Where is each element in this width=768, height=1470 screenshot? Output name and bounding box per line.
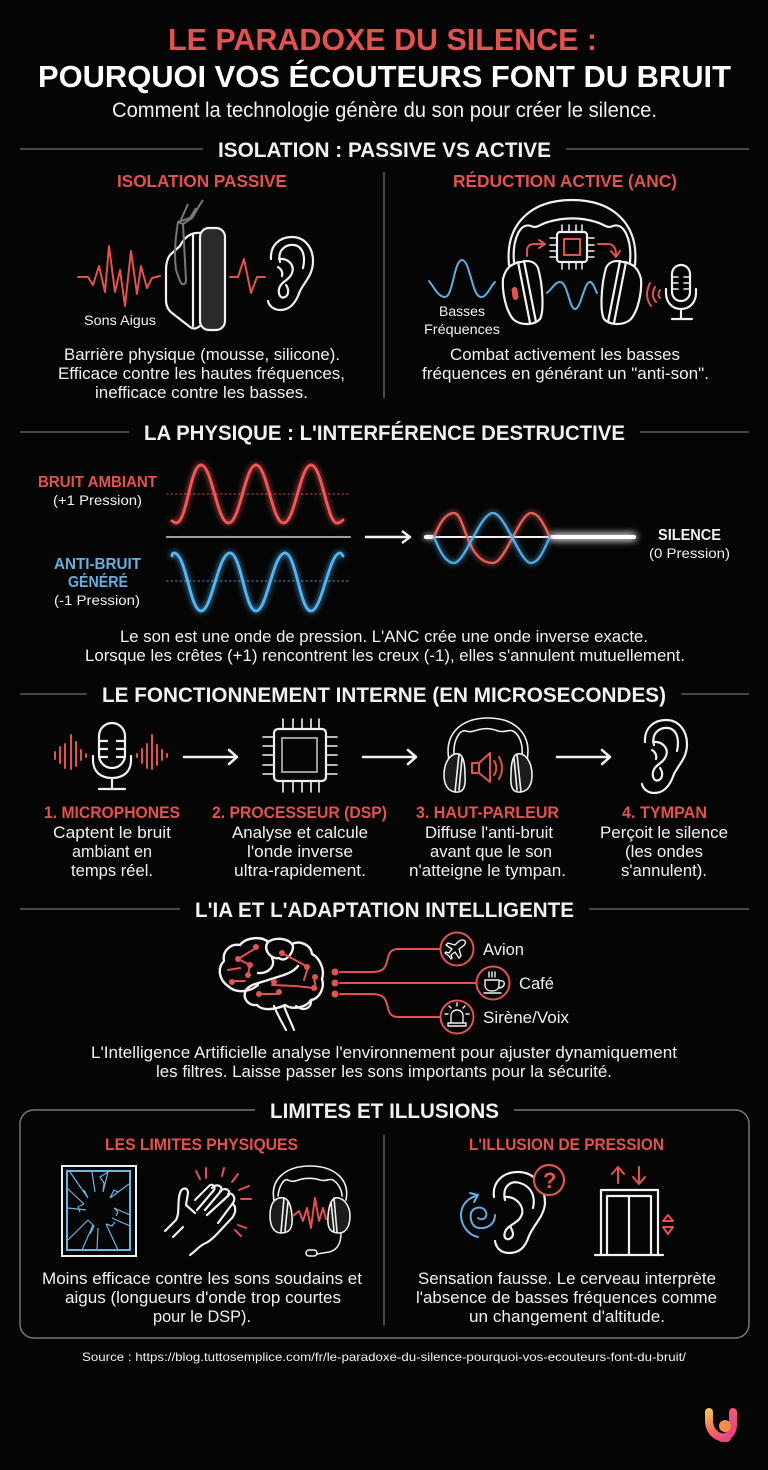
text: passive description: Efficace contre les hautes fréquences, — [58, 365, 345, 383]
label: bruit ambiant: (+1 Pression) — [53, 492, 142, 508]
title: POURQUOI VOS ÉCOUTEURS FONT DU BRUIT — [38, 59, 731, 94]
label: bruit ambiant: BRUIT AMBIANT — [38, 474, 158, 491]
chart: anti-noise wave — [166, 553, 350, 611]
text: n'atteigne le tympan. — [409, 862, 566, 880]
arrows: signal path — [527, 240, 620, 257]
panel: active noise cancelling — [422, 170, 709, 383]
heading: physics: LA PHYSIQUE : L'INTERFÉRENCE DESTRUCTIVE — [144, 420, 625, 445]
text: illusion description: Sensation fausse. Le cerveau interprète — [418, 1270, 716, 1288]
text — [600, 824, 728, 880]
subheading: L'ILLUSION DE PRESSION — [469, 1136, 664, 1154]
title: LE PARADOXE DU SILENCE : — [168, 22, 597, 57]
text: physics description: Le son est une onde de pression. L'ANC crée une onde inverse exacte. — [120, 628, 648, 646]
panel: physical limits — [42, 1136, 362, 1326]
label: silence: SILENCE — [658, 527, 721, 544]
panel: pressure illusion — [416, 1136, 717, 1326]
icon: siren — [440, 1000, 474, 1034]
text: physics description — [85, 628, 685, 665]
subheading: isolation passive: ISOLATION PASSIVE — [117, 171, 287, 191]
text — [232, 824, 368, 880]
frame — [20, 1110, 749, 1338]
text: ambiant en — [72, 843, 152, 861]
chart: resulting silence — [424, 513, 636, 563]
text: limits description: pour le DSP). — [153, 1308, 251, 1326]
arrow — [363, 750, 416, 764]
section: destructive interference — [20, 420, 749, 665]
text: limits description: Moins efficace contre les sons soudains et — [42, 1270, 362, 1288]
label: bruit ambiant — [38, 474, 158, 508]
text: passive description: Barrière physique (mousse, silicone). — [64, 346, 340, 364]
icon: ear with question: ? — [543, 1168, 556, 1193]
label: 2. PROCESSEUR (DSP) — [212, 803, 387, 822]
text: passive description: inefficace contre les basses. — [95, 384, 308, 402]
icon: brain — [220, 938, 323, 1030]
title — [38, 22, 731, 94]
subheading: LES LIMITES PHYSIQUES — [105, 1136, 298, 1154]
label: siren: Sirène/Voix — [483, 1009, 570, 1027]
heading: internal operation: LE FONCTIONNEMENT INTERNE (EN MICROSECONDES) — [102, 683, 666, 707]
icon: spiral — [461, 1193, 495, 1237]
arrow — [557, 750, 610, 764]
connectors — [332, 949, 476, 1017]
text: passive description — [58, 346, 345, 402]
step 4: eardrum — [600, 720, 728, 880]
icon: ear cushion — [166, 200, 225, 330]
text: active description: fréquences en générant un "anti-son". — [422, 365, 709, 383]
source: Source : https://blog.tuttosemplice.com/fr/le-paradoxe-du-silence-pourquoi-vos-ecouteurs-font-du-bruit/ — [82, 1350, 687, 1364]
text: limits description — [42, 1270, 362, 1326]
icon: sound arcs — [647, 283, 660, 306]
text: s'annulent). — [621, 862, 707, 880]
icon: ear with question — [494, 1165, 564, 1253]
icon: microphone — [666, 265, 696, 319]
logo — [709, 1412, 733, 1438]
icon: reduced wave — [230, 259, 265, 293]
label: silence — [649, 527, 730, 561]
text: Perçoit le silence — [600, 824, 728, 842]
chart: ambient noise wave — [166, 465, 350, 523]
panel: isolation passive — [58, 171, 345, 402]
text: ultra-rapidement. — [234, 862, 366, 880]
section: ai adaptation — [20, 898, 749, 1081]
icon: high frequency wave — [78, 246, 160, 306]
icon: coffee — [476, 966, 510, 1000]
section: internal operation — [20, 683, 749, 880]
text: Analyse et calcule — [232, 824, 368, 842]
step 2: processor — [212, 719, 416, 880]
icon: processor — [550, 225, 594, 269]
text: illusion description: un changement d'altitude. — [469, 1308, 665, 1326]
icon: elevator — [595, 1167, 673, 1255]
text: limits description: aigus (longueurs d'onde trop courtes — [65, 1289, 341, 1307]
label: anti-bruit: (-1 Pression) — [54, 592, 140, 608]
icon: anc headphones — [503, 200, 641, 324]
text: ai description: L'Intelligence Artificielle analyse l'environnement pour ajuster dynamiquement — [91, 1044, 677, 1062]
label: anti-bruit — [54, 556, 142, 608]
text — [409, 824, 566, 880]
text: active description: Combat activement les basses — [450, 346, 680, 364]
text: avant que le son — [430, 843, 552, 861]
icon: ear — [268, 237, 313, 310]
text: ai description: les filtres. Laisse passer les sons importants pour la sécurité. — [156, 1063, 612, 1081]
icon: ear — [642, 720, 687, 793]
label: 3. HAUT-PARLEUR — [416, 803, 559, 822]
icon: clapping hands — [165, 1168, 251, 1255]
label: anti-bruit: GÉNÉRÉ — [68, 574, 128, 591]
label: basses frequences — [424, 303, 500, 337]
subheading: anc: RÉDUCTION ACTIVE (ANC) — [453, 170, 677, 191]
text: Captent le bruit — [53, 824, 171, 842]
step 1: microphones — [44, 723, 237, 880]
label: anti-bruit: ANTI-BRUIT — [54, 556, 142, 573]
icon: low frequency wave — [429, 260, 495, 297]
heading: limits: LIMITES ET ILLUSIONS — [270, 1099, 499, 1123]
icon: plane — [440, 932, 474, 966]
text: Diffuse l'anti-bruit — [425, 824, 553, 842]
label: 4. TYMPAN — [622, 803, 707, 822]
arrow: to result — [365, 531, 410, 543]
label: basses frequences: Basses — [439, 303, 485, 319]
text: active description — [422, 346, 709, 383]
label: avion: Avion — [483, 941, 524, 959]
icon: headphones with speaker — [444, 718, 532, 792]
label: basses frequences: Fréquences — [424, 321, 500, 337]
section: isolation passive vs active — [20, 138, 749, 402]
label: cafe: Café — [519, 975, 554, 993]
arrow — [184, 750, 237, 764]
label: silence: (0 Pression) — [649, 545, 730, 561]
text: l'onde inverse — [247, 843, 353, 861]
subtitle: Comment la technologie génère du son pour créer le silence. — [112, 99, 657, 122]
section: limits and illusions — [20, 1099, 749, 1338]
step 3: speaker — [409, 718, 610, 880]
label: sons aigus: Sons Aigus — [84, 312, 156, 328]
heading: isolation: ISOLATION : PASSIVE VS ACTIVE — [218, 138, 551, 162]
icon: anti-noise wave — [547, 282, 597, 309]
icon: chip — [263, 719, 337, 792]
text: physics description: Lorsque les crêtes (+1) rencontrent les creux (-1), elles s'annulent mutuellement. — [85, 647, 685, 665]
label: 1. MICROPHONES — [44, 803, 180, 822]
text — [53, 824, 171, 880]
text: temps réel. — [71, 862, 153, 880]
text: illusion description — [416, 1270, 717, 1326]
text: (les ondes — [625, 843, 703, 861]
heading: ai: L'IA ET L'ADAPTATION INTELLIGENTE — [195, 898, 574, 922]
text: ai description — [91, 1044, 677, 1081]
icon: broken glass — [62, 1166, 136, 1256]
icon: microphone with sound — [55, 723, 167, 789]
icon: headset with spike — [270, 1166, 350, 1256]
text: illusion description: l'absence de basses fréquences comme — [416, 1289, 717, 1307]
